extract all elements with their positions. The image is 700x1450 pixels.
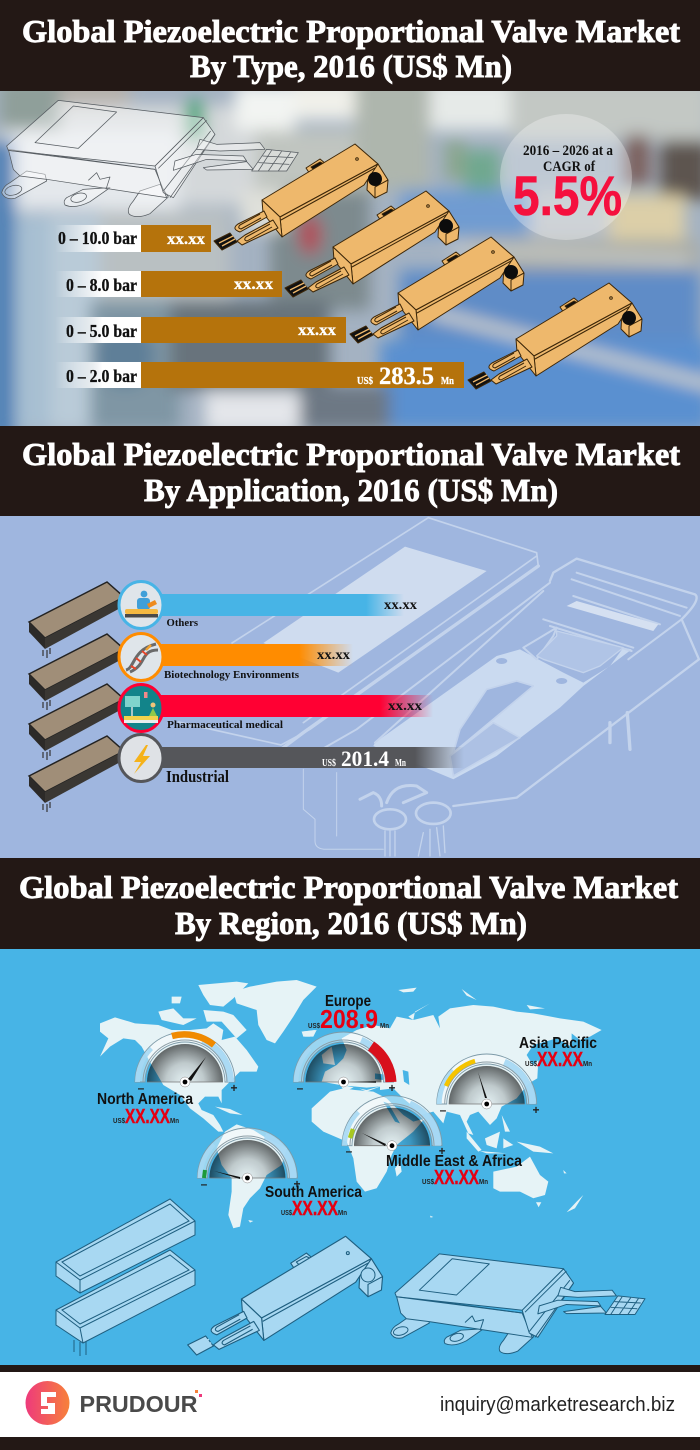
bar chart: pressure ranges: 283.5 <box>379 363 434 390</box>
gauge: europe: – <box>297 1081 304 1095</box>
value: industrial: Mn <box>395 758 406 769</box>
world map: americas <box>100 980 317 1228</box>
label: north america: XX.XX <box>125 1106 170 1128</box>
bar chart: pressure ranges: xx.xx <box>298 322 336 339</box>
contact email: inquiry@marketresearch.biz <box>440 1394 675 1416</box>
relay 1 <box>29 582 124 658</box>
relay 4 <box>29 736 124 812</box>
label: asia pacific <box>519 1035 597 1071</box>
bar chart: pressure ranges: 0 – 8.0 bar <box>66 275 137 295</box>
logo: PRUDOUR <box>80 1391 198 1417</box>
drawing: valve <box>188 1236 383 1355</box>
gauge: middle east and africa <box>342 1096 446 1158</box>
labels: application bars: Pharmaceutical medical <box>167 719 283 731</box>
gauge: south america <box>197 1128 301 1191</box>
labels: application bars: Industrial <box>166 767 229 786</box>
bar: pharmaceutical <box>160 695 433 717</box>
logo <box>26 1381 202 1425</box>
label: north america: US$ <box>113 1118 125 1125</box>
header: by region: Global Piezoelectric Proportional Valve Market <box>19 869 678 905</box>
icon: others <box>119 582 163 628</box>
panel: by application <box>0 516 700 858</box>
gold valve 2 <box>285 191 459 297</box>
label: south america: US$ <box>281 1210 292 1217</box>
gauge: south america: + <box>293 1177 301 1191</box>
labels: application bars: Biotechnology Environments <box>164 669 300 681</box>
drawing: relay pair <box>56 1199 195 1356</box>
header: by application: Global Piezoelectric Proportional Valve Market <box>22 436 680 472</box>
labels: application bars: xx.xx <box>388 699 422 714</box>
label: asia pacific: Asia Pacific <box>519 1035 597 1052</box>
label: middle east and africa: US$ <box>422 1179 434 1186</box>
gauge: north america: + <box>230 1081 238 1095</box>
header: by type: Global Piezoelectric Proportional Valve Market <box>22 13 680 49</box>
gauge: north america: – <box>138 1081 145 1095</box>
header: by application <box>0 426 700 516</box>
labels: application bars: xx.xx <box>317 648 350 663</box>
gauge: europe <box>294 1032 396 1095</box>
label: europe: 208.9 <box>320 1004 378 1034</box>
label: asia pacific: XX.XX <box>537 1049 584 1071</box>
label: south america: Mn <box>338 1210 347 1217</box>
bar: industrial <box>160 747 464 768</box>
gauge: middle east and africa: – <box>346 1144 353 1158</box>
icon: valve port <box>361 1268 375 1282</box>
label: south america: XX.XX <box>292 1198 339 1220</box>
label: north america <box>97 1091 193 1128</box>
label: middle east and africa: Mn <box>479 1179 488 1186</box>
labels: application bars: Others <box>166 617 199 629</box>
bar chart: pressure ranges: 0 – 2.0 bar <box>66 366 137 386</box>
label: europe: US$ <box>308 1023 320 1030</box>
label: north america: North America <box>97 1091 193 1108</box>
background: blurred hospital photo <box>0 80 700 440</box>
header: by region <box>0 858 700 949</box>
bar chart: pressure ranges <box>55 225 464 390</box>
world map: eurasia, africa, oceania <box>302 988 602 1218</box>
seas cut out of the land <box>345 1070 409 1123</box>
bar chart: pressure ranges: 0 – 10.0 bar <box>58 228 137 248</box>
label: middle east and africa: Middle East & Africa <box>386 1153 522 1170</box>
icon: biotechnology <box>119 634 163 680</box>
footer bar upper <box>0 1365 700 1372</box>
icon: industrial <box>119 734 163 782</box>
gauge: north america <box>135 1032 238 1095</box>
gauge: asia pacific: – <box>440 1103 447 1117</box>
labels: application bars: xx.xx <box>384 598 417 613</box>
footer bar lower <box>0 1437 700 1450</box>
callout: CAGR: 2016 – 2026 at a <box>523 143 613 159</box>
value: industrial <box>322 746 406 771</box>
bar chart: pressure ranges: Mn <box>441 375 454 387</box>
label: asia pacific: Mn <box>583 1061 592 1068</box>
panel: by type <box>0 80 700 440</box>
label: south america: South America <box>265 1184 362 1201</box>
header: by type: By Type, 2016 (US$ Mn) <box>190 48 512 84</box>
panel: by region <box>0 949 700 1365</box>
bar chart: pressure ranges: xx.xx <box>234 276 273 293</box>
callout: CAGR: CAGR of <box>543 159 596 175</box>
gauge: south america: – <box>201 1177 208 1191</box>
footer: logo and contact <box>0 1372 700 1437</box>
gauge: middle east and africa: + <box>438 1144 446 1158</box>
gold valve 4 <box>468 283 642 389</box>
bar chart: pressure ranges: 0 – 5.0 bar <box>66 321 137 341</box>
label: middle east and africa: XX.XX <box>434 1167 479 1189</box>
icon: pharmaceutical <box>119 684 163 732</box>
gauge: asia pacific: + <box>532 1103 540 1117</box>
callout: CAGR: 5.5% <box>513 164 622 227</box>
header: by region: By Region, 2016 (US$ Mn) <box>175 905 527 941</box>
label: south america <box>265 1184 362 1220</box>
labels: application bars <box>164 598 422 786</box>
drawing: large faded valve <box>178 518 699 856</box>
label: europe: Mn <box>380 1023 389 1030</box>
bar chart: pressure ranges: xx.xx <box>167 231 205 248</box>
label: europe <box>308 993 389 1034</box>
gold valve 3 <box>350 237 524 343</box>
label: middle east and africa <box>386 1153 522 1189</box>
callout: CAGR <box>500 114 632 240</box>
label: europe: Europe <box>325 993 371 1010</box>
bar: others <box>160 594 404 616</box>
header: by application: By Application, 2016 (US$ Mn) <box>144 472 558 508</box>
gauge: europe: + <box>388 1081 396 1095</box>
relay 3 <box>29 684 124 760</box>
drawing: large outlined valve <box>2 100 298 217</box>
gauge: asia pacific <box>437 1054 540 1117</box>
header: by type <box>0 0 700 91</box>
value: industrial: 201.4 <box>341 746 389 771</box>
relay 2 <box>29 634 124 710</box>
label: asia pacific: US$ <box>525 1061 537 1068</box>
bar: biotechnology <box>160 644 353 666</box>
gold valve 1 <box>214 144 388 250</box>
label: north america: Mn <box>170 1118 179 1125</box>
value: industrial: US$ <box>322 758 336 769</box>
icon: valve port dots <box>368 172 636 325</box>
drawing: flat valve <box>391 1254 645 1354</box>
bar chart: pressure ranges: US$ <box>357 375 373 387</box>
